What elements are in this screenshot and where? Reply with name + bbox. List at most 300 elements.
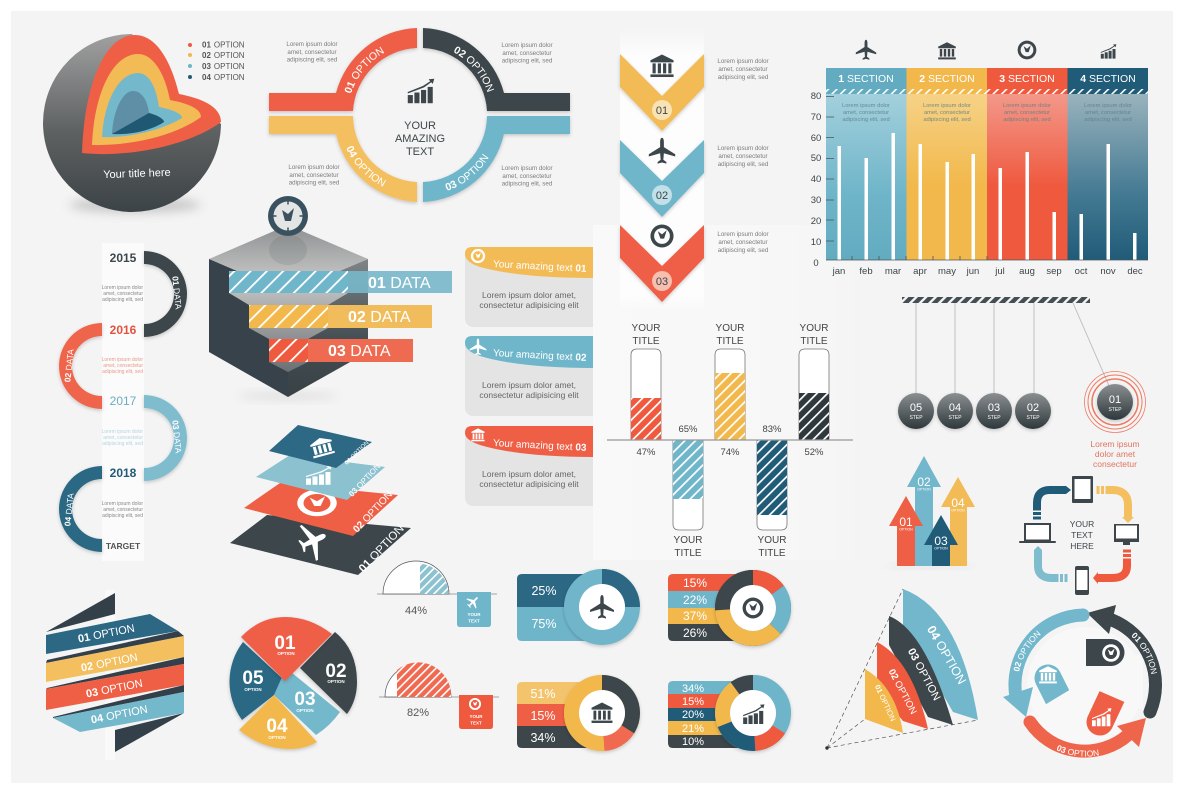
petal 05 navy — [229, 642, 285, 720]
chevron lorem text: amet, consectetur — [718, 153, 768, 160]
segment 04 yellow — [269, 116, 417, 202]
timeline lorem text: Lorem ipsum dolor — [102, 285, 143, 291]
step balls: 02 — [1027, 402, 1039, 414]
arc 03 teal — [144, 395, 187, 481]
plane labels: 02 OPTION — [351, 489, 395, 535]
petal labels: OPTION — [268, 735, 286, 740]
arrow 01 dark — [1087, 605, 1156, 712]
tube percentages: 74% — [720, 447, 740, 458]
donut: 51 / 15 / 34 — [517, 675, 640, 751]
chevron 01 — [620, 54, 704, 131]
sail labels: 02 OPTION — [886, 667, 919, 716]
chevron icons — [649, 54, 675, 248]
segment labels: 01 OPTION — [344, 46, 384, 93]
section lorem text: adipiscing elit, sed — [1003, 117, 1051, 123]
ribbon 02 yellow — [46, 636, 184, 682]
ribbon 04 teal — [53, 692, 184, 732]
tube percentages: 83% — [762, 424, 782, 435]
tube percentages: 52% — [804, 447, 824, 458]
segment labels: 02 OPTION — [454, 46, 494, 92]
step balls: STEP — [909, 415, 923, 421]
timeline lorem text: adipiscing elit, sed — [102, 369, 143, 375]
layer 02 yellow heart — [92, 54, 201, 145]
plane 01 dark — [230, 515, 411, 575]
panel: device cycle — [1019, 476, 1139, 595]
section headers — [826, 68, 1148, 94]
sail labels: 04 OPTION — [924, 623, 969, 687]
section icons — [856, 40, 1116, 60]
icon: tablet — [1072, 476, 1093, 503]
ring centre text: YOUR — [404, 120, 436, 132]
arrow labels: 02 OPTION — [1014, 630, 1041, 672]
legend: 03 OPTION — [202, 62, 245, 71]
card 01 — [465, 247, 605, 327]
half pie — [385, 664, 451, 697]
segment labels: 03 OPTION — [446, 154, 488, 190]
segment 02 dark — [423, 28, 570, 111]
donut: 34 / 15 / 20 / 21 / 10 — [668, 675, 791, 751]
petal 01 red — [241, 617, 332, 681]
arrow labels: 01 — [899, 515, 913, 529]
month labels: oct — [1075, 266, 1088, 277]
section lorem text: adipiscing elit, sed — [842, 117, 890, 123]
inner pill teal — [1048, 678, 1065, 712]
arrow labels — [1014, 630, 1158, 757]
sail 02 red — [877, 642, 928, 729]
tube titles: YOUR — [674, 535, 702, 546]
plane labels: 03 OPTION — [347, 462, 382, 499]
y axis labels: 0 — [813, 258, 819, 269]
arrow 03 navy — [924, 515, 958, 566]
segment labels: 04 OPTION — [346, 146, 386, 186]
panel: timeline — [59, 243, 187, 561]
baseline — [377, 593, 497, 595]
month labels: feb — [859, 266, 873, 277]
sphere title: Your title here — [103, 167, 171, 181]
chevron lorem text — [717, 58, 769, 254]
strings — [916, 303, 1110, 395]
section lorem text — [842, 103, 1132, 123]
ring lorem text: Lorem ipsum dolor — [288, 164, 340, 171]
sail labels: 03 OPTION — [905, 646, 942, 703]
timeline lorem text: adipiscing elit, sed — [102, 513, 143, 519]
panel: circular arrows — [1003, 605, 1162, 758]
tube 74% — [715, 349, 745, 440]
section lorem text: Lorem ipsum dolor — [1003, 103, 1051, 109]
cube top — [209, 225, 368, 293]
panel: pinwheel pie — [229, 617, 357, 749]
navy heart lower face — [112, 113, 164, 134]
baseline — [379, 696, 499, 698]
text tab — [457, 592, 491, 627]
cube right face — [288, 259, 368, 397]
text tab: TEXT — [468, 618, 480, 624]
segment labels — [344, 46, 494, 190]
donut: 15 / 22 / 37 / 26: 15% — [683, 576, 707, 590]
timeline lorem text: amet, consectetur — [103, 435, 143, 441]
petal labels — [242, 633, 347, 740]
arrow 02 teal — [907, 456, 941, 566]
step caption: dolor amet — [1095, 449, 1136, 459]
data row 03 — [269, 339, 413, 362]
card 02 — [465, 336, 605, 416]
panel: half pie 82% — [379, 662, 499, 729]
panel: heart sphere — [43, 34, 245, 213]
petal labels: OPTION — [244, 687, 262, 692]
segment 01 red — [269, 28, 417, 111]
plane labels: 04 OPTION — [344, 440, 371, 467]
sail labels — [873, 623, 969, 723]
petal 02 dark — [300, 632, 357, 714]
ring lorem text: adipiscing elit, sed — [502, 180, 553, 188]
chevron lorem text: adipiscing elit, sed — [718, 247, 769, 254]
tube 83% — [757, 440, 787, 530]
step balls: STEP — [1026, 415, 1040, 421]
timeline lorem text: adipiscing elit, sed — [102, 297, 143, 303]
tube 65% — [673, 440, 703, 530]
plane 03 teal — [256, 455, 385, 500]
arc labels: 04 DATA — [62, 492, 76, 527]
card 01: Your amazing text 01 — [493, 259, 587, 275]
panel: layered planes — [230, 425, 411, 575]
panel: rising arrows — [886, 456, 975, 568]
arrow labels: OPTION — [917, 488, 931, 492]
month labels: apr — [913, 266, 927, 277]
timeline lorem text: Lorem ipsum dolor — [102, 357, 143, 363]
sail 04 teal — [903, 589, 978, 720]
cube shadow — [238, 393, 338, 399]
text tab: TEXT — [470, 720, 482, 726]
tube titles — [632, 323, 828, 559]
icon: growth chart — [408, 79, 434, 103]
arrow labels — [899, 475, 965, 550]
layer 04 navy heart — [112, 91, 164, 134]
cycle centre text: HERE — [1070, 541, 1094, 551]
years: TARGET — [106, 541, 141, 551]
icon: bank on layer 04 — [309, 435, 335, 458]
tube percentages: 65% — [678, 424, 698, 435]
arrow labels: 03 — [934, 534, 948, 548]
ring lorem text: amet, consectetur — [289, 172, 339, 179]
y axis labels: 80 — [811, 91, 821, 102]
years — [106, 251, 141, 551]
section lorem text: adipiscing elit, sed — [1084, 117, 1132, 123]
chevron numbers: 03 — [656, 276, 668, 288]
section headers: 2 SECTION — [919, 73, 975, 85]
section headers: 4 SECTION — [1080, 73, 1136, 85]
plane 02 red — [244, 483, 398, 536]
tube percentages — [636, 424, 824, 458]
icon: clock on cube — [268, 196, 308, 236]
tube titles: TITLE — [758, 548, 786, 559]
y axis labels: 20 — [811, 216, 821, 227]
donut: 15 / 22 / 37 / 26: 26% — [683, 626, 707, 640]
y axis labels: 40 — [811, 174, 821, 185]
ribbon 01 navy — [46, 614, 178, 654]
petal 04 yellow — [239, 695, 317, 749]
tube percentages: 47% — [636, 447, 656, 458]
ring centre text: AMAZING — [395, 133, 445, 145]
plane labels: 01 OPTION — [357, 523, 407, 575]
tube titles: TITLE — [716, 336, 744, 347]
y axis labels: 30 — [811, 195, 821, 206]
card 03: Your amazing text 03 — [493, 438, 587, 454]
panel: hanging steps — [898, 297, 1146, 469]
donut: 34 / 15 / 20 / 21 / 10: 21% — [682, 723, 704, 735]
legend — [188, 40, 245, 82]
text tab — [459, 695, 493, 729]
section lorem text: amet, consectetur — [1004, 110, 1050, 116]
striped bar — [902, 297, 1090, 303]
month labels: mar — [885, 266, 901, 277]
arc labels — [62, 276, 184, 527]
chevron 02 — [620, 140, 704, 217]
arrow labels: OPTION — [951, 508, 965, 512]
petal labels: 01 — [274, 633, 296, 654]
timeline lorem text — [102, 285, 143, 519]
ring lorem text: adipiscing elit, sed — [289, 180, 340, 186]
arrow labels: 01 OPTION — [1132, 632, 1158, 674]
inner pill dark — [1086, 639, 1124, 666]
arc 01 dark — [144, 251, 187, 337]
chevron lorem text: Lorem ipsum dolor — [717, 231, 769, 238]
vanishing point — [825, 746, 829, 750]
ribbon labels: 02 OPTION — [80, 652, 139, 674]
plane labels — [344, 440, 407, 575]
section headers: 3 SECTION — [999, 73, 1055, 85]
donut: 25 / 75: 75% — [531, 617, 557, 631]
timeline lorem text: amet, consectetur — [103, 363, 143, 369]
card 01: consectetur adipisicing elit — [479, 300, 579, 310]
section lorem text: adipiscing elit, sed — [923, 117, 971, 123]
cube left face — [209, 259, 288, 397]
month labels: jul — [994, 266, 1005, 277]
ring centre text: TEXT — [406, 146, 434, 158]
blade covering teal pill — [1028, 680, 1090, 748]
panel: thermometer bars — [607, 323, 853, 559]
donut: 25 / 75 — [517, 569, 640, 645]
data row 02 — [249, 305, 432, 328]
ring lorem text: amet, consectetur — [502, 173, 552, 180]
data row 01 — [229, 271, 452, 293]
legend: 02 OPTION — [202, 51, 245, 60]
data row 01: 01 DATA — [368, 275, 431, 292]
petal labels: OPTION — [296, 708, 314, 713]
section columns — [826, 94, 1148, 260]
arrow labels: 04 — [951, 496, 965, 510]
inner fan — [1027, 627, 1143, 743]
hatched share — [420, 564, 449, 594]
tube titles: YOUR — [632, 323, 660, 334]
step balls: 05 — [910, 402, 922, 414]
arrow 04 yellow — [941, 477, 975, 566]
chevron lorem text: Lorem ipsum dolor — [717, 58, 769, 65]
chevron numbers: 01 — [656, 105, 668, 117]
petal labels: OPTION — [277, 651, 295, 656]
icon: monitor — [1114, 524, 1139, 545]
percent label: 44% — [405, 605, 427, 617]
panel: four option ring — [268, 28, 572, 205]
data row 03: 03 DATA — [328, 343, 391, 360]
donut: 34 / 15 / 20 / 21 / 10: 15% — [682, 696, 704, 708]
axis ticks — [826, 96, 1148, 260]
arc labels: 02 DATA — [62, 348, 76, 383]
tube titles: YOUR — [800, 323, 828, 334]
y axis labels: 60 — [811, 133, 821, 144]
panel: folded ribbon — [46, 590, 184, 760]
panel: funnel cube — [209, 196, 452, 399]
arc labels: 03 DATA — [170, 420, 184, 454]
chevron numbers — [652, 100, 672, 291]
donut: 15 / 22 / 37 / 26: 22% — [683, 593, 707, 607]
arrow labels: OPTION — [899, 528, 913, 532]
card 03: Lorem ipsum dolor amet, — [482, 469, 576, 479]
timeline lorem text: Lorem ipsum dolor — [102, 501, 143, 507]
chevron lorem text: Lorem ipsum dolor — [717, 145, 769, 152]
clock reflection — [269, 235, 307, 265]
donut: 34 / 15 / 20 / 21 / 10: 34% — [682, 683, 704, 695]
step balls: STEP — [948, 415, 962, 421]
donut: 15 / 22 / 37 / 26 — [668, 570, 791, 646]
layer 01 red heart — [82, 35, 221, 154]
white bars — [838, 133, 1136, 260]
month labels: sep — [1046, 266, 1062, 277]
light centre panel — [593, 225, 873, 560]
ring lorem text — [286, 41, 553, 188]
card 01: Lorem ipsum dolor amet, — [482, 290, 576, 300]
tube titles: TITLE — [632, 336, 660, 347]
legend: 01 OPTION — [202, 40, 245, 50]
y axis labels: 70 — [811, 112, 821, 123]
tube 52% — [799, 349, 829, 440]
step balls: STEP — [987, 415, 1001, 421]
sphere body — [43, 34, 221, 212]
ribbon labels: 01 OPTION — [77, 623, 136, 645]
section lorem text: Lorem ipsum dolor — [923, 103, 971, 109]
step balls: 03 — [988, 402, 1000, 414]
hatched share — [397, 662, 451, 697]
layer 03 teal heart — [102, 73, 182, 137]
connector teal — [1034, 546, 1069, 578]
petal 03 teal — [274, 668, 340, 735]
section lorem text: amet, consectetur — [843, 110, 889, 116]
arrow labels: 03 OPTION — [1057, 745, 1099, 757]
plane 04 navy — [269, 425, 372, 468]
ribbon labels — [77, 623, 149, 726]
sail labels: 01 OPTION — [873, 683, 898, 723]
connector navy — [1037, 486, 1071, 521]
tube titles: TITLE — [674, 548, 702, 559]
section headers: 1 SECTION — [838, 73, 894, 85]
arc 02 red — [59, 323, 102, 409]
dark folds — [46, 593, 184, 752]
segment 03 teal — [423, 116, 570, 202]
step balls: 04 — [949, 402, 961, 414]
data row 02: 02 DATA — [348, 309, 411, 326]
chevron lorem text: adipiscing elit, sed — [718, 161, 769, 168]
timeline lorem text: adipiscing elit, sed — [102, 441, 143, 447]
icon: plane on layer 01 — [293, 518, 334, 564]
section lorem text: Lorem ipsum dolor — [1084, 103, 1132, 109]
panel: half pie 44% — [377, 561, 497, 627]
ring lorem text: Lorem ipsum dolor — [501, 42, 553, 49]
connector red — [1093, 548, 1127, 584]
blade covering red pill — [1090, 655, 1143, 710]
month labels: jan — [832, 266, 845, 277]
donut: 34 / 15 / 20 / 21 / 10: 20% — [682, 709, 704, 721]
text tab: YOUR — [467, 612, 481, 617]
donut: 51 / 15 / 34: 15% — [530, 709, 556, 723]
month labels: jun — [966, 266, 979, 277]
chevron 03 — [620, 225, 704, 302]
panel: chevron list — [620, 28, 769, 310]
cycle centre text: TEXT — [1071, 530, 1093, 540]
years: 2018 — [110, 466, 137, 480]
half pie — [383, 561, 449, 594]
y axis labels — [811, 91, 821, 269]
ring lorem text: Lorem ipsum dolor — [501, 165, 553, 172]
step balls: 01 — [1109, 394, 1121, 406]
icon: clock on layer 02 — [297, 490, 337, 516]
chevron numbers: 02 — [656, 190, 668, 202]
petal labels: 02 — [325, 661, 347, 682]
step balls: STEP — [1108, 407, 1122, 413]
inner pill red — [1100, 690, 1115, 722]
timeline lorem text: Lorem ipsum dolor — [102, 429, 143, 435]
petal labels: 03 — [294, 689, 316, 710]
target rings — [1084, 372, 1146, 432]
month labels: dec — [1127, 266, 1143, 277]
panel: perspective sails — [825, 589, 978, 750]
timeline lorem text: amet, consectetur — [103, 291, 143, 297]
ribbon labels: 03 OPTION — [85, 678, 144, 700]
donut: 51 / 15 / 34: 34% — [530, 731, 556, 745]
years: 2016 — [110, 323, 137, 337]
y axis labels: 10 — [811, 237, 821, 248]
baseline — [607, 439, 853, 441]
sail 03 dark — [889, 616, 953, 725]
tube titles: TITLE — [800, 336, 828, 347]
ring lorem text: Lorem ipsum dolor — [286, 41, 338, 48]
chevron lorem text: amet, consectetur — [718, 239, 768, 246]
ribbon labels: 04 OPTION — [90, 704, 149, 726]
card 02: Your amazing text 02 — [493, 348, 587, 364]
years: 2017 — [110, 394, 137, 408]
section lorem text: amet, consectetur — [924, 110, 970, 116]
tube titles: YOUR — [716, 323, 744, 334]
ring lorem text: amet, consectetur — [287, 49, 337, 56]
tube titles: YOUR — [758, 535, 786, 546]
step balls — [898, 384, 1133, 429]
donut: 34 / 15 / 20 / 21 / 10: 10% — [682, 736, 704, 748]
ring lorem text: adipiscing elit, sed — [502, 58, 553, 64]
donut: 51 / 15 / 34: 51% — [530, 687, 556, 701]
donut: 15 / 22 / 37 / 26: 37% — [683, 609, 707, 623]
card 03 — [465, 426, 605, 506]
inner pill icons — [1039, 644, 1120, 726]
petal labels: OPTION — [327, 679, 345, 684]
connector yellow — [1095, 490, 1134, 523]
arc labels: 01 DATA — [170, 276, 184, 310]
ring lorem text: amet, consectetur — [502, 50, 552, 57]
panel: section bar chart — [811, 40, 1148, 277]
funnel interior — [229, 271, 348, 372]
perspective dashes — [827, 589, 978, 748]
month labels — [832, 266, 1143, 277]
ribbon 03 red — [46, 664, 184, 710]
cycle centre text: YOUR — [1070, 519, 1094, 529]
percent label: 82% — [407, 707, 429, 719]
